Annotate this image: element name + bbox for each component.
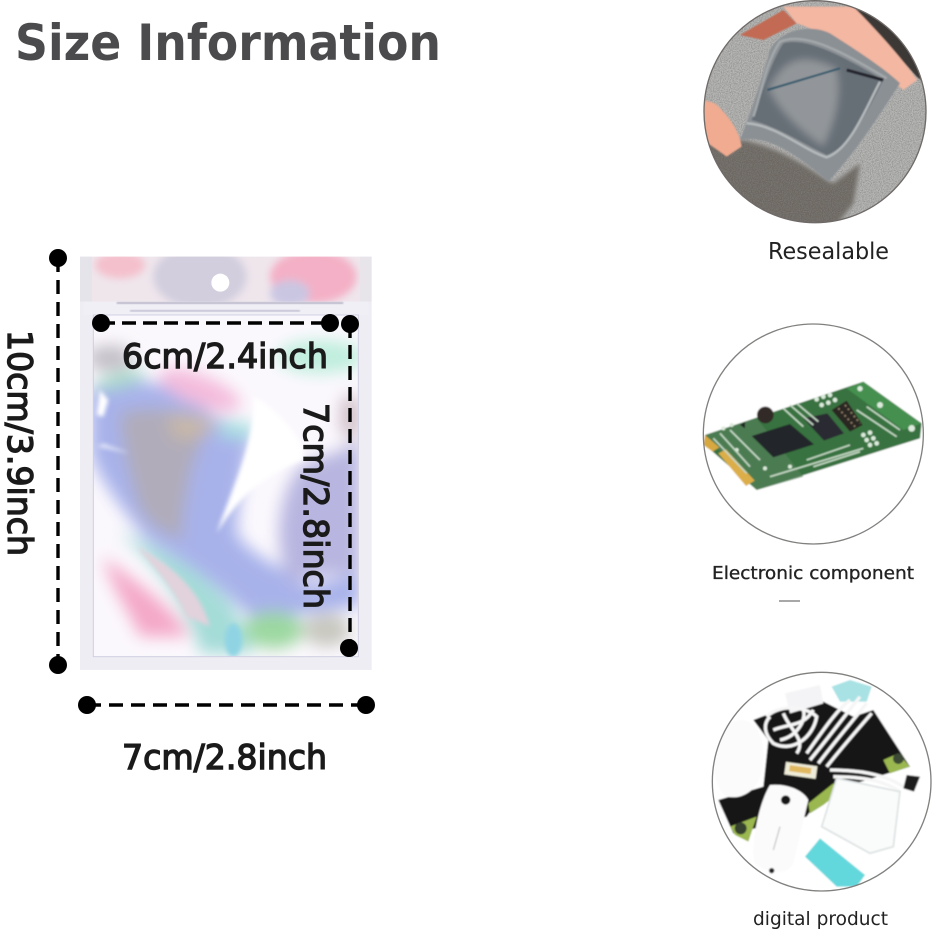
dimension: total width 7cm: 7cm/2.8inch — [122, 738, 327, 778]
hang hole — [211, 274, 229, 292]
white sheen — [97, 390, 304, 657]
bag header strip — [80, 256, 372, 302]
title: Size Information — [15, 14, 441, 72]
zip seal band — [83, 302, 368, 315]
bag main holographic panel — [87, 315, 363, 657]
small grey mark — [779, 600, 800, 602]
dimension: inner width 6cm: 6cm/2.4inch — [122, 337, 328, 377]
dimension: total height 10cm: 10cm/3.9inch — [0, 330, 39, 556]
label: digital product: digital product — [753, 908, 888, 930]
feature: digital product photo — [710, 670, 933, 893]
feature: resealable photo — [697, 0, 930, 233]
label: resealable: Resealable — [768, 239, 889, 265]
holographic bag — [80, 245, 372, 670]
label: electronic component: Electronic component — [712, 563, 914, 584]
dimension: inner height 7cm: 7cm/2.8inch — [295, 403, 335, 609]
dimension: inner height 7cm — [295, 315, 359, 657]
feature: electronic component photo — [703, 323, 927, 547]
dimension: total height 10cm — [0, 249, 67, 674]
dimension: total width 7cm — [78, 696, 375, 778]
dimension: inner width 6cm — [92, 314, 339, 377]
